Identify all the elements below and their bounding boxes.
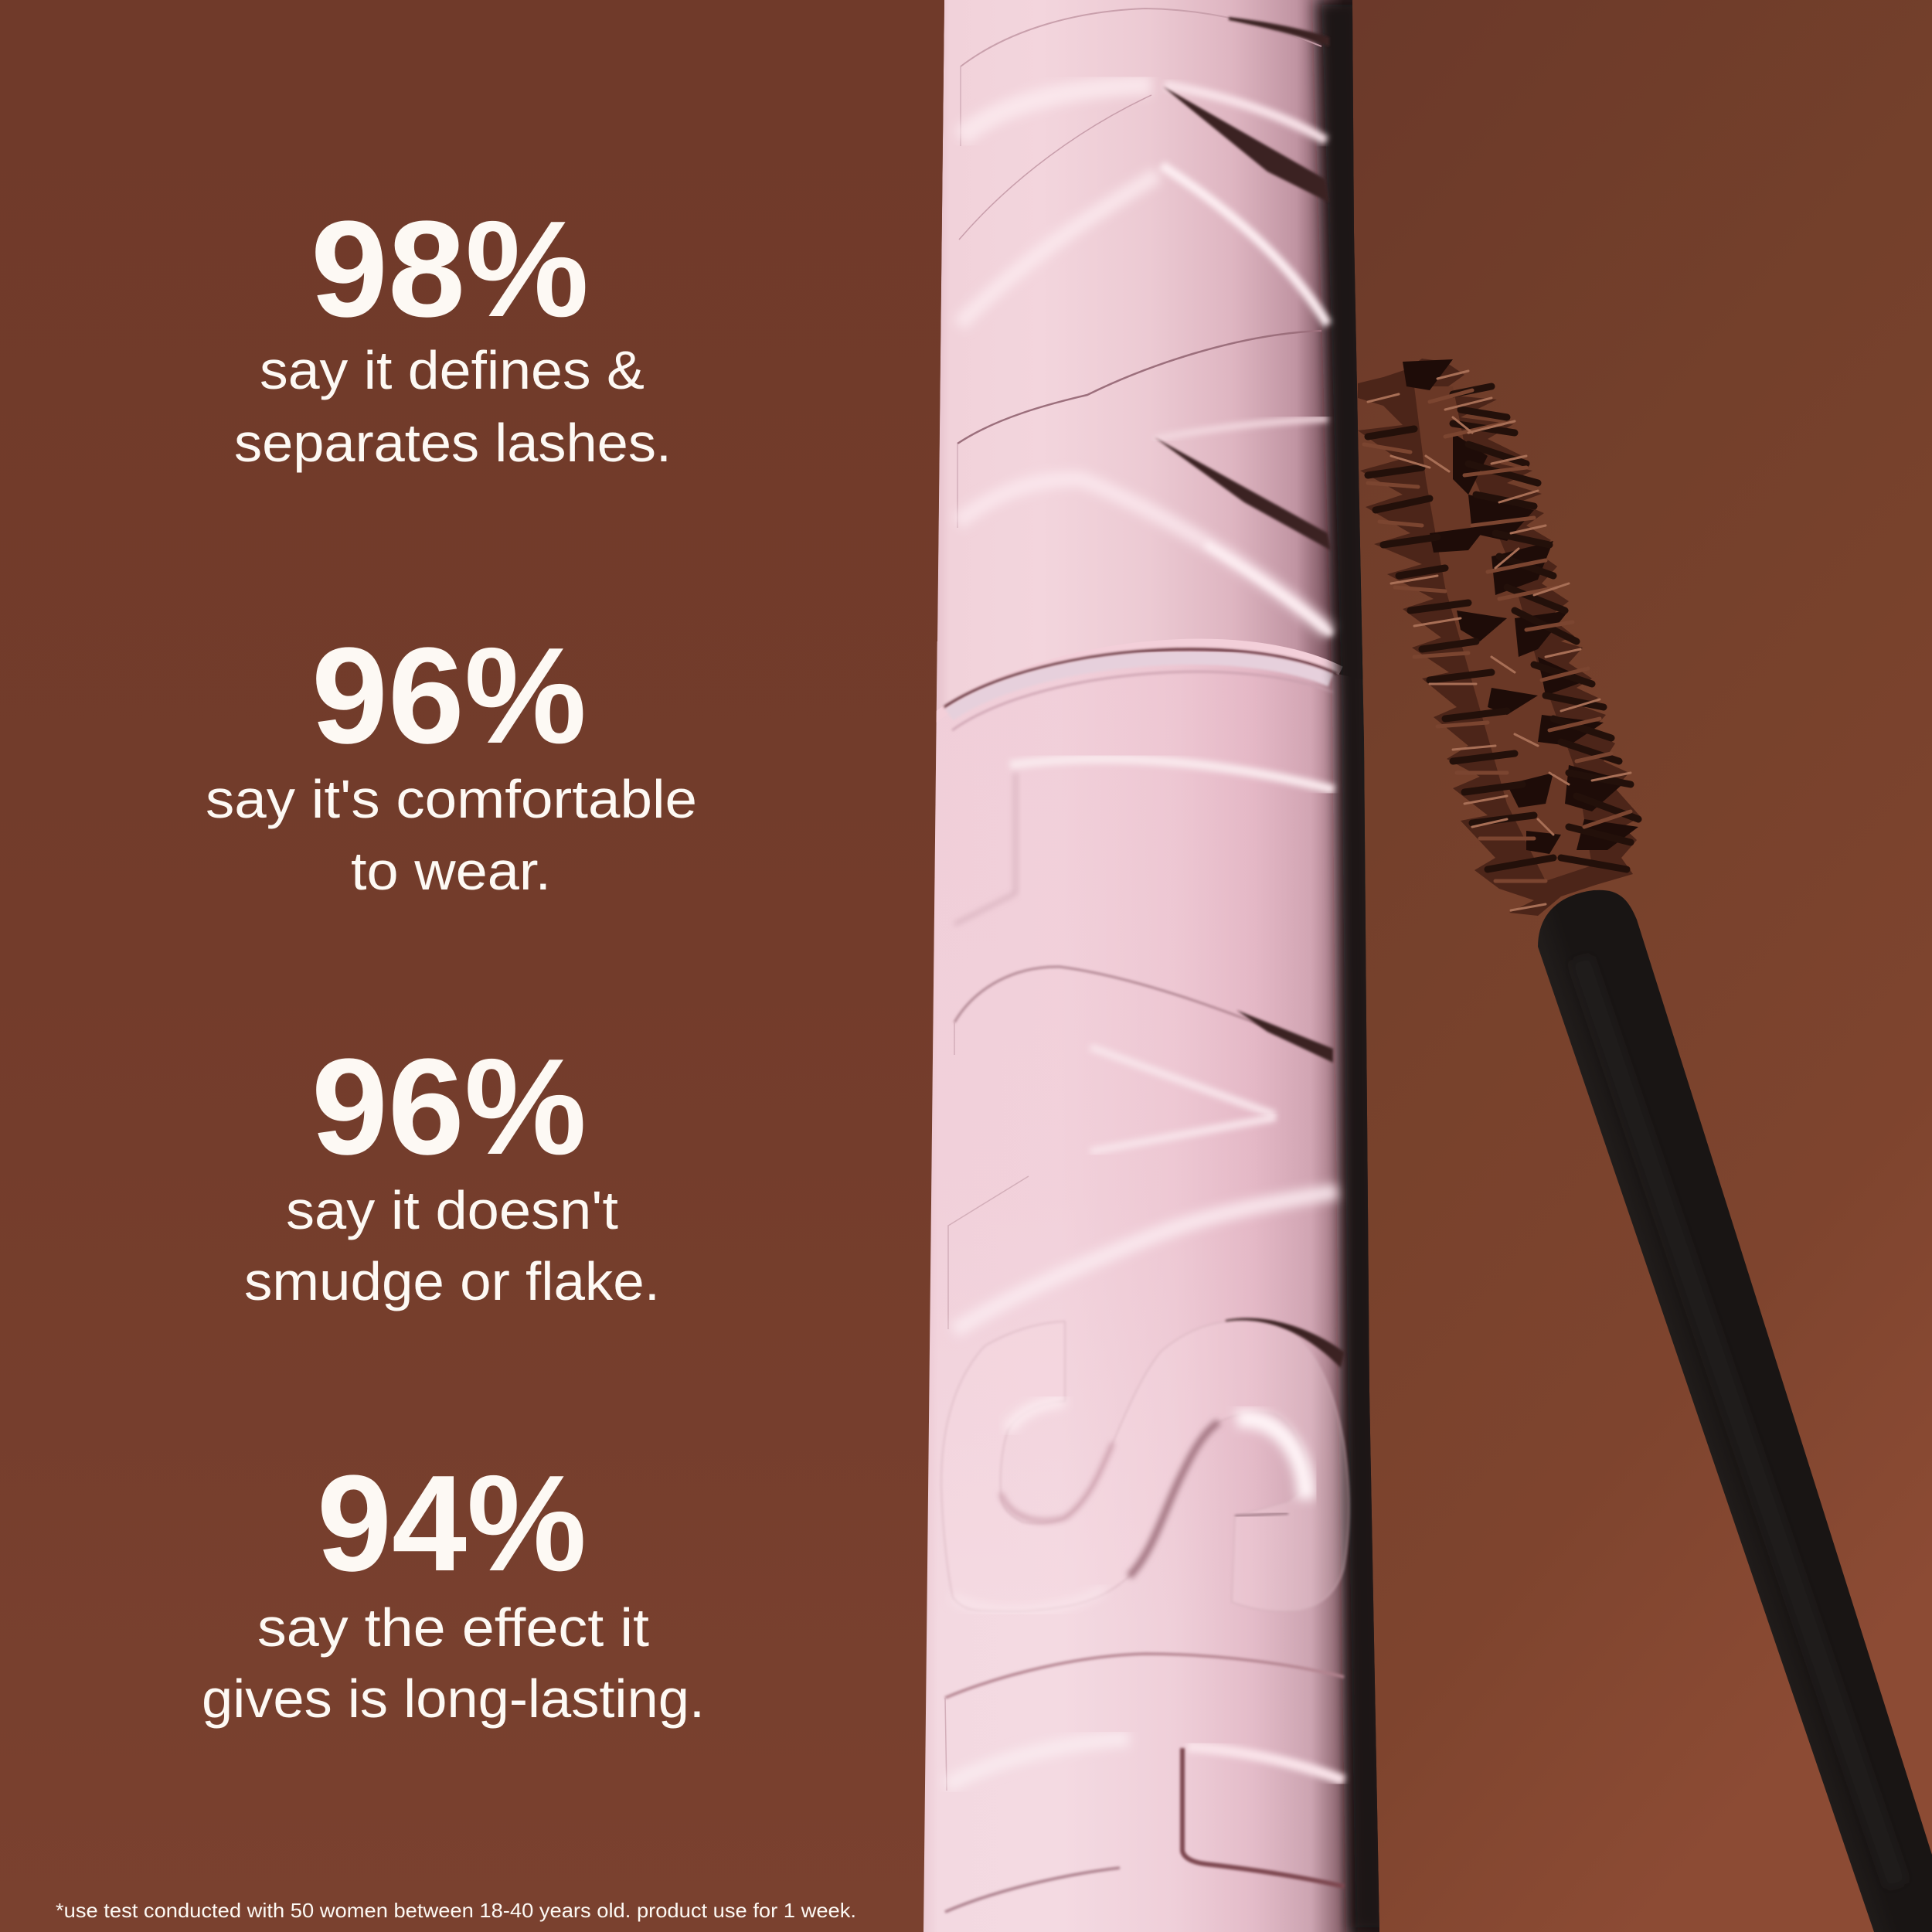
background: left brown panel: [0, 0, 966, 1932]
cap and body seam: [934, 644, 1341, 730]
reddish mid tone core: [1414, 386, 1592, 881]
stat number 94%: 94%: [317, 1447, 587, 1600]
stat number 96%: 96%: [311, 1030, 587, 1183]
footnote: *use test conducted with 50 women between 18-40 years old. product use for 1 week.: [56, 1899, 856, 1922]
stat caption line 1: say the effect it: [257, 1597, 649, 1658]
embossed letter H: [945, 1654, 1344, 1912]
stat caption line 1: say it doesn't: [286, 1180, 618, 1240]
stat caption line 2: gives is long-lasting.: [202, 1668, 705, 1729]
stat caption line 1: say it defines &: [260, 340, 645, 400]
mascara tube: [920, 0, 1387, 1932]
wand sheen: [1580, 958, 1897, 1886]
tube lower body: [920, 641, 1383, 1932]
stat block: 98 percent: [234, 192, 672, 473]
stat caption line 2: separates lashes.: [234, 413, 672, 473]
tube lower tint: [933, 667, 1343, 1345]
embossed letter A: [948, 967, 1337, 1331]
mascara brush: [1358, 359, 1641, 916]
embossed letter L: [954, 759, 1334, 924]
wand stem: [1538, 890, 1932, 1932]
highlight bristles: [1368, 371, 1631, 910]
stat caption line 1: say it's comfortable: [206, 769, 697, 829]
dark clumps: [1403, 359, 1638, 854]
stat number 96%: 96%: [311, 619, 587, 772]
background: right brown panel: [966, 0, 1932, 1932]
stat block: 96 percent comfortable: [206, 619, 697, 901]
reddish mid tone bristles: [1364, 390, 1631, 881]
stat block: 96 percent smudge: [244, 1030, 660, 1311]
dark bristles: [1368, 386, 1638, 869]
embossed letter Y: [957, 331, 1332, 634]
mascara wand handle: [1538, 890, 1932, 1932]
stat caption line 2: to wear.: [351, 841, 551, 901]
stat number 98%: 98%: [311, 192, 589, 345]
embossed letter K: [959, 9, 1329, 325]
brush silhouette: [1358, 359, 1641, 916]
stat block: 94 percent: [202, 1447, 705, 1729]
tube upper cap: [937, 0, 1364, 715]
embossed letter S: [941, 1318, 1349, 1611]
stat caption line 2: smudge or flake.: [244, 1251, 660, 1311]
right edge shadow band: [1317, 0, 1387, 1932]
